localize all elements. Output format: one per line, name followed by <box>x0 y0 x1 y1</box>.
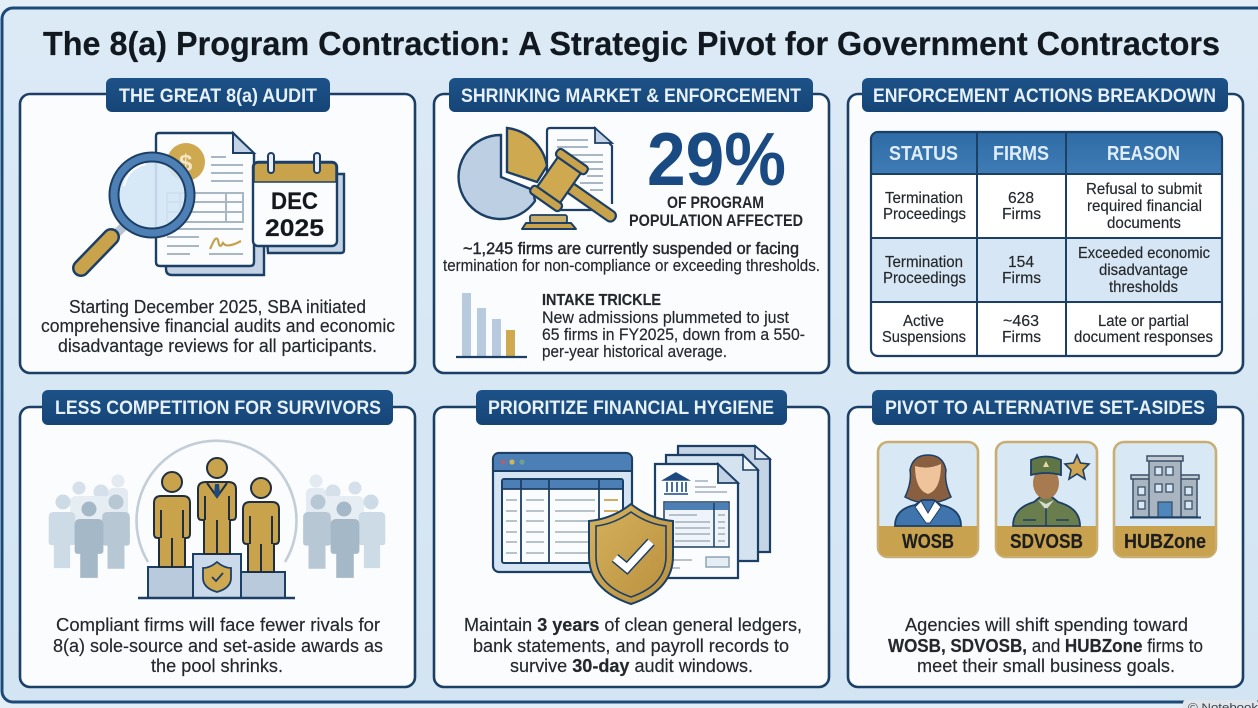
table row: termination proceedings, 154 firms: Termination <box>885 254 963 271</box>
text block: fewer rivals: Compliant firms will face fewer rivals for <box>56 614 380 635</box>
table row: termination proceedings, 628 firms: 628 <box>1008 190 1034 207</box>
table row: termination proceedings, 628 firms: documents <box>1107 215 1181 232</box>
table row: termination proceedings, 154 firms: disadvantage <box>1099 262 1188 279</box>
text block: fewer rivals: the pool shrinks. <box>151 655 283 676</box>
text block: agency spending shift <box>888 614 1203 676</box>
card: HUBZone <box>1114 442 1216 557</box>
icon: audit document, magnifier and calendar: $ <box>179 150 193 177</box>
table row: termination proceedings, 628 firms: Refusal to submit <box>1086 181 1203 198</box>
icon: audit document, magnifier and calendar <box>81 133 344 275</box>
table header row: STATUS <box>889 143 958 165</box>
table row: termination proceedings, 628 firms: required financial <box>1087 198 1202 215</box>
table row: active suspensions: Active <box>903 313 944 330</box>
text block: agency spending shift: WOSB, SDVOSB, and HUBZone firms to <box>888 635 1203 656</box>
table row: active suspensions <box>882 313 1213 346</box>
heading: pivot to alternative set-asides <box>872 390 1217 425</box>
table row: active suspensions: Firms <box>1002 329 1041 346</box>
heading: enforcement actions breakdown: ENFORCEMENT ACTIONS BREAKDOWN <box>873 85 1216 107</box>
text block: intake trickle: New admissions plummeted to just <box>542 309 789 327</box>
calendar date <box>265 188 324 242</box>
text block: agency spending shift: Agencies will shift spending toward <box>905 614 1188 635</box>
card: HUBZone: HUBZone <box>1124 531 1206 553</box>
big stat: 29%: 29% <box>647 117 786 201</box>
panel: pivot to alternative set-asides <box>848 390 1243 687</box>
icon: faded rival crowd left <box>49 474 130 578</box>
text block: affected firms: termination for non-compliance or exceeding thresholds. <box>443 257 820 275</box>
text block: intake trickle: 65 firms in FY2025, down from a 550- <box>542 326 805 344</box>
heading: shrinking market and enforcement <box>449 78 813 112</box>
card: SDVOSB <box>996 442 1097 557</box>
heading: shrinking market and enforcement: SHRINKING MARKET & ENFORCEMENT <box>461 85 801 107</box>
title: The 8(a) Program Contraction: A Strategic Pivot for Government Contractors <box>43 25 1220 62</box>
text block: fewer rivals: 8(a) sole-source and set-aside awards as <box>53 635 383 656</box>
text block: audit description: Starting December 2025, SBA initiated <box>69 296 366 317</box>
panel: prioritize financial hygiene <box>434 390 829 687</box>
bar chart: falling admissions <box>456 293 527 357</box>
text block: record keeping: bank statements, and payroll records to <box>473 635 789 656</box>
table row: termination proceedings, 628 firms <box>883 181 1203 232</box>
stat caption: OF PROGRAM <box>667 194 764 212</box>
heading: prioritize financial hygiene: PRIORITIZE FINANCIAL HYGIENE <box>488 397 774 419</box>
table row: active suspensions: document responses <box>1074 329 1213 346</box>
table row: termination proceedings, 628 firms: Termination <box>885 190 963 207</box>
heading: enforcement actions breakdown <box>862 78 1228 112</box>
table row: termination proceedings, 628 firms: Proceedings <box>883 206 966 223</box>
heading: less competition for survivors: LESS COMPETITION FOR SURVIVORS <box>55 397 381 419</box>
icon: podium with three compliant firms <box>136 441 296 598</box>
stat caption: POPULATION AFFECTED <box>629 212 803 230</box>
table row: termination proceedings, 628 firms: Firms <box>1002 206 1041 223</box>
text block: audit description: disadvantage reviews for all participants. <box>58 335 377 356</box>
icon: ledger window <box>493 453 632 572</box>
icon: stack of bank statements <box>655 446 770 578</box>
text block: affected firms: ~1,245 firms are currently suspended or facing <box>463 240 799 258</box>
heading: the great 8(a) audit <box>106 78 330 112</box>
text block: affected firms <box>443 240 820 275</box>
table row: termination proceedings, 154 firms: Exceeded economic <box>1078 245 1210 262</box>
heading: the great 8(a) audit: THE GREAT 8(a) AUDIT <box>119 85 317 107</box>
table row: termination proceedings, 154 firms: thresholds <box>1109 279 1178 296</box>
text block: audit description <box>41 296 395 356</box>
table: enforcement actions <box>871 132 1222 356</box>
table header row: REASON <box>1107 143 1180 165</box>
table row: active suspensions: Suspensions <box>882 329 966 346</box>
icon: pie chart, document and gavel <box>459 128 630 241</box>
table row: active suspensions: Late or partial <box>1098 313 1189 330</box>
heading: less competition for survivors <box>42 390 393 425</box>
text block: intake trickle: INTAKE TRICKLE <box>542 292 661 309</box>
text block: record keeping <box>464 614 802 676</box>
stat caption <box>629 194 803 230</box>
text block: record keeping: survive 30-day audit windows. <box>510 655 753 676</box>
heading: prioritize financial hygiene <box>476 390 787 425</box>
card: SDVOSB: SDVOSB <box>1010 531 1083 553</box>
calendar date: 2025 <box>265 215 324 242</box>
table row: termination proceedings, 154 firms: 154 <box>1008 254 1034 271</box>
table row: active suspensions: ~463 <box>1003 313 1039 330</box>
text block: audit description: comprehensive financial audits and economic <box>41 315 395 336</box>
panel: the great 8(a) audit <box>20 78 415 373</box>
table header row <box>889 143 1180 165</box>
heading: pivot to alternative set-asides: PIVOT TO ALTERNATIVE SET-ASIDES <box>885 397 1205 419</box>
panel: shrinking market and enforcement <box>434 78 829 373</box>
table header row: FIRMS <box>993 143 1049 165</box>
panel: less competition for survivors <box>20 390 415 687</box>
text block: fewer rivals <box>53 614 383 676</box>
icon: faded rival crowd right <box>303 474 385 578</box>
text block: agency spending shift: meet their small business goals. <box>917 655 1175 676</box>
text block: intake trickle <box>542 292 805 361</box>
card: WOSB <box>878 442 978 557</box>
watermark <box>1183 700 1258 708</box>
calendar date: DEC <box>271 188 318 215</box>
table row: termination proceedings, 154 firms: Proceedings <box>883 270 966 287</box>
text block: record keeping: Maintain 3 years of clean general ledgers, <box>464 614 802 635</box>
table row: termination proceedings, 154 firms <box>883 245 1210 296</box>
table row: termination proceedings, 154 firms: Firms <box>1002 270 1041 287</box>
card: WOSB: WOSB <box>902 531 954 553</box>
panel: enforcement actions breakdown <box>848 78 1243 373</box>
text block: intake trickle: per-year historical average. <box>542 343 727 361</box>
icon: gold shield with check <box>589 504 673 604</box>
